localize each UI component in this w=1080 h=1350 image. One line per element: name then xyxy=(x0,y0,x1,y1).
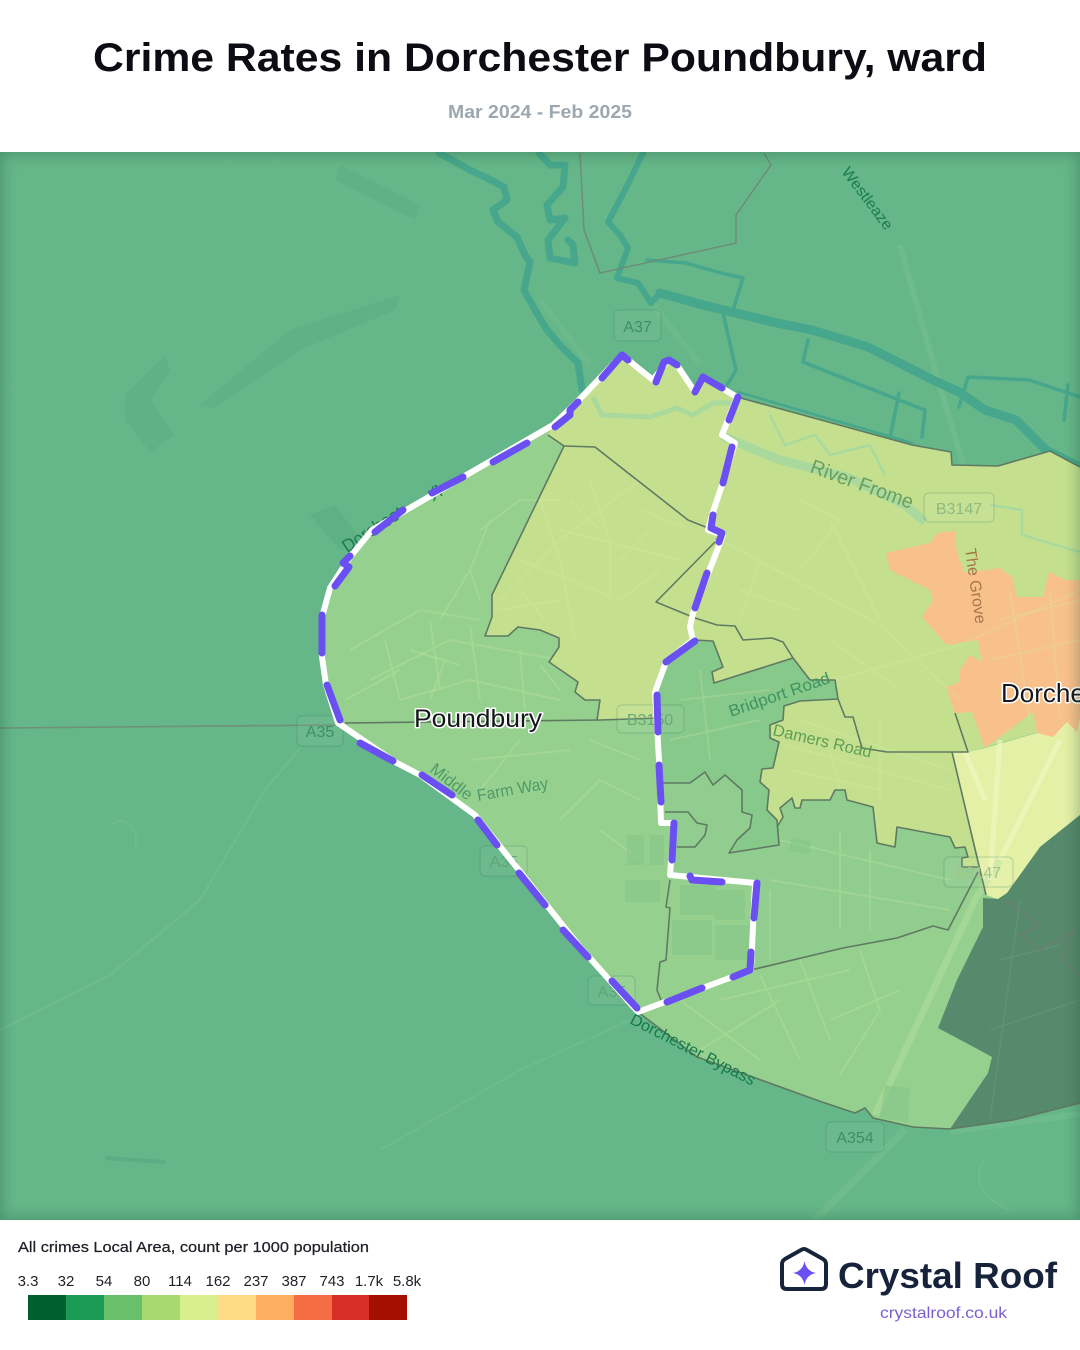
ward outline white xyxy=(322,355,755,1012)
area: pale yellow xyxy=(952,717,1080,899)
background terrain and roads xyxy=(7,244,1073,1213)
road badge: A35 south: A35 xyxy=(598,984,626,1001)
road badge: A354 xyxy=(826,1122,884,1152)
road badge: B3147 south: B3147 xyxy=(955,865,1001,882)
legend scale values: 5.8k xyxy=(393,1273,422,1290)
area: low crime, dark green xyxy=(938,815,1080,1129)
road badge: B3147 north xyxy=(924,493,994,522)
choropleth map xyxy=(0,152,1080,1220)
legend scale values: 54 xyxy=(96,1273,112,1290)
website: crystalroof.co.uk xyxy=(880,1305,1008,1322)
label: Middle Farm Way xyxy=(430,763,548,801)
road badge: B3147 south xyxy=(944,857,1013,887)
rivers xyxy=(439,153,1080,467)
river through the wards xyxy=(593,397,1080,552)
area: Bridport Road, mid green xyxy=(655,640,838,853)
legend scale values: 237 xyxy=(243,1273,269,1290)
area: Poundbury east and town, light green xyxy=(485,355,1080,867)
subtitle: date range: Mar 2024 - Feb 2025 xyxy=(448,102,632,122)
area: medium crime base xyxy=(325,430,1078,1128)
road badge: B3150: B3150 xyxy=(627,712,673,729)
legend scale values: 3.3 xyxy=(18,1273,38,1290)
legend scale values: 743 xyxy=(319,1273,345,1290)
legend scale values: 387 xyxy=(281,1273,307,1290)
label: Damers Road: Damers Road xyxy=(771,721,874,762)
road badge: B3147 north: B3147 xyxy=(936,501,982,518)
label: Bridport Road: Bridport Road xyxy=(726,669,833,721)
legend scale values xyxy=(18,1273,422,1290)
title: Crime Rates in Dorchester Poundbury, ward xyxy=(93,36,987,80)
legend xyxy=(18,1239,422,1320)
footer background xyxy=(0,1220,1080,1350)
legend colour bar xyxy=(28,1295,407,1320)
legend scale values: 80 xyxy=(134,1273,150,1290)
area: high crime town centre, orange xyxy=(886,531,1080,748)
road badge: A37 xyxy=(614,310,661,341)
legend scale values: 1.7k xyxy=(355,1273,384,1290)
legend scale values: 32 xyxy=(58,1273,74,1290)
logo xyxy=(782,1249,1058,1322)
boundary north of ward xyxy=(580,153,771,273)
road badge: B3150 xyxy=(617,705,684,733)
streets xyxy=(345,480,1080,1120)
icon: house with star xyxy=(782,1249,826,1289)
ward outline purple dashes xyxy=(322,355,757,1008)
A35 road line xyxy=(0,725,338,728)
label: Poundbury: Poundbury xyxy=(414,705,543,733)
road badge: A37: A37 xyxy=(623,319,652,336)
label: Westleaze: Westleaze xyxy=(838,164,896,234)
legend scale values: 114 xyxy=(168,1273,192,1290)
road badge: A354: A354 xyxy=(836,1130,874,1147)
label: Dorchester Bypass north: Dorchester Bypass xyxy=(338,461,471,556)
label: River Frome: River Frome xyxy=(807,456,916,514)
label: The Grove: The Grove xyxy=(961,547,988,625)
wordmark: Crystal Roof xyxy=(838,1255,1058,1296)
label: Middle Farm Way: Farm Way xyxy=(476,775,550,805)
ward and neighbourhood boundary lines xyxy=(345,397,1080,1129)
road badge: A35 middle: A35 xyxy=(490,854,518,871)
road badge: A35 south xyxy=(588,976,635,1005)
road badge: A35 west xyxy=(297,716,343,746)
road badge: A35 west: A35 xyxy=(306,724,334,741)
field and building patches xyxy=(625,835,910,1122)
legend title: All crimes Local Area, count per 1000 population xyxy=(18,1239,369,1256)
label: Middle Farm Way: Middle xyxy=(427,760,476,804)
label: Dorchester Bypass south: Dorchester Bypass xyxy=(627,1011,758,1089)
road badge: A35 middle xyxy=(480,846,527,876)
legend scale values: 162 xyxy=(205,1273,231,1290)
area: south central green xyxy=(661,772,978,970)
